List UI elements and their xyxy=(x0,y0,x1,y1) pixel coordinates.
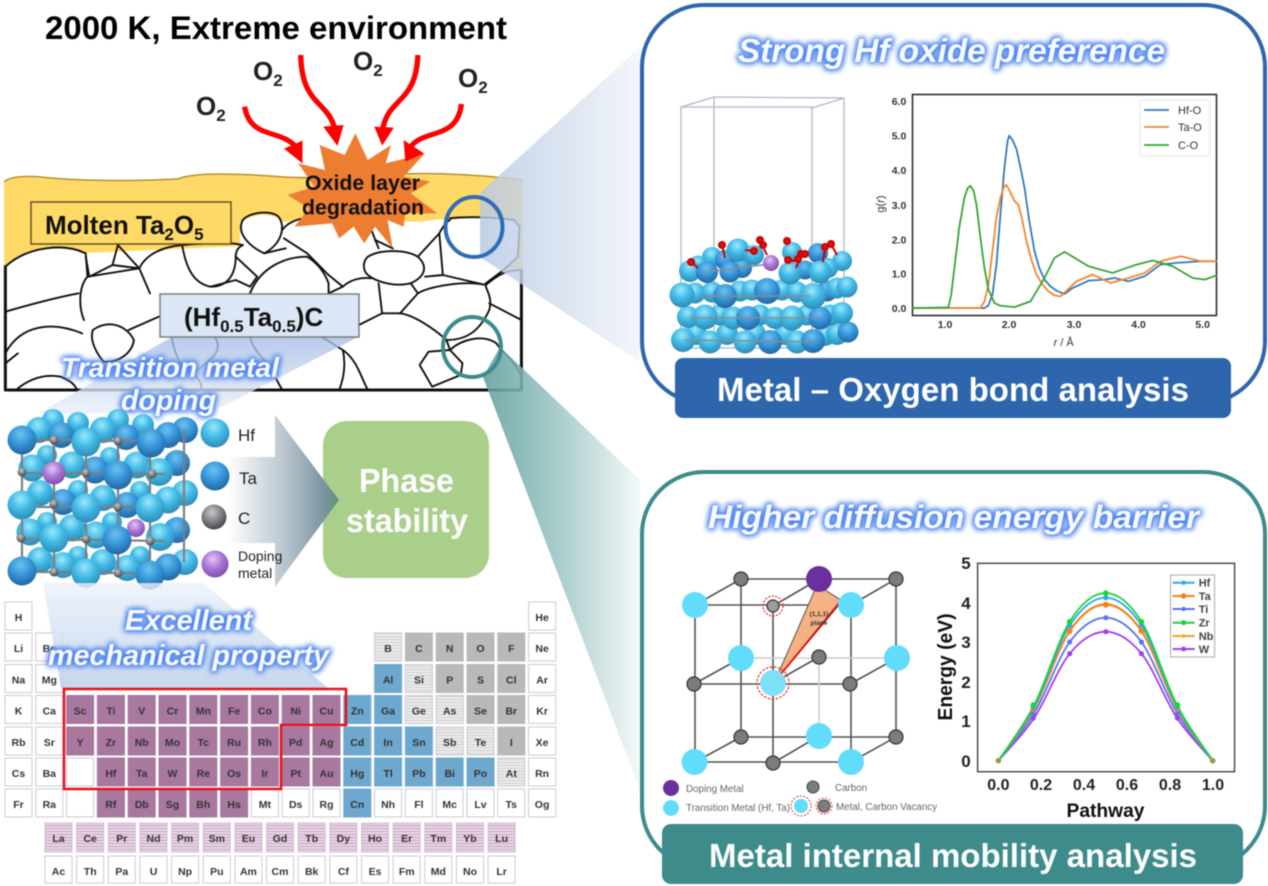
chart legend: W xyxy=(1199,644,1210,656)
panel outline xyxy=(642,5,1265,403)
actinides xyxy=(45,856,515,883)
chart legend xyxy=(1171,575,1215,657)
metal nodes xyxy=(682,592,910,775)
main block: Ru xyxy=(227,737,241,749)
lanthanides: Pm xyxy=(177,833,193,845)
far atoms xyxy=(37,409,154,566)
main block: P xyxy=(446,674,453,686)
panel heading: Higher diffusion energy barrier xyxy=(708,499,1201,535)
x tick labels: 2.0 xyxy=(1002,319,1016,331)
axis title: energy: Energy (eV) xyxy=(935,614,957,720)
x tick labels: 0.2 xyxy=(1030,777,1052,794)
axis titles xyxy=(875,195,1074,349)
axis title: pathway: Pathway xyxy=(1066,801,1145,822)
y tick labels: 4 xyxy=(961,594,971,613)
carbon vacancy ring xyxy=(763,596,783,616)
Hf: Hf xyxy=(238,426,255,445)
main block: Rf xyxy=(105,799,117,811)
x tick labels: 1.0 xyxy=(1202,777,1224,794)
main block: Se xyxy=(474,706,487,718)
lanthanides: Gd xyxy=(273,833,287,845)
main block: Pt xyxy=(290,768,301,780)
y tick labels: 1 xyxy=(961,712,971,731)
main block: Ni xyxy=(290,706,301,718)
main block: I xyxy=(510,737,513,749)
x tick labels: 0.4 xyxy=(1073,777,1095,794)
axis titles: r / Å xyxy=(1054,336,1074,349)
label: (Hf0.5Ta0.5)C: Ta xyxy=(244,302,273,332)
main block: Mo xyxy=(165,737,180,749)
lanthanides: Ce xyxy=(83,833,97,845)
barrier curves xyxy=(998,593,1213,761)
doping metal key xyxy=(663,780,744,796)
main block: Li xyxy=(14,643,23,655)
Doping metal xyxy=(202,548,282,581)
doping metal node xyxy=(806,566,832,592)
label: Molten Ta2O5: 5 xyxy=(194,225,204,244)
O2 label 4: O xyxy=(458,63,478,93)
chart legend: Ti xyxy=(1199,604,1208,616)
actinides: Ac xyxy=(52,866,65,878)
y tick labels: 2.0 xyxy=(892,234,906,246)
main block: Db xyxy=(135,799,149,811)
main block: He xyxy=(535,612,549,624)
C xyxy=(202,504,250,530)
x tick labels xyxy=(938,319,1210,331)
transition metal key xyxy=(663,800,790,816)
main block: Nb xyxy=(135,737,149,749)
main block: Br xyxy=(505,706,517,718)
lanthanides: Er xyxy=(401,833,412,845)
main block: Bh xyxy=(196,799,210,811)
main block: Fe xyxy=(228,706,240,718)
slab simulation cell xyxy=(670,97,858,354)
lanthanides: Sm xyxy=(209,833,225,845)
dopant atom in front layer xyxy=(42,462,66,484)
actinides: Pu xyxy=(210,866,224,878)
label: Molten Ta2O5: O xyxy=(174,210,194,240)
main block: Ag xyxy=(320,737,334,749)
main block: H xyxy=(15,612,22,624)
panel: metal internal mobility analysis xyxy=(642,472,1265,884)
x tick labels: 0.8 xyxy=(1159,777,1181,794)
y tick labels xyxy=(892,96,906,315)
Zr curve xyxy=(998,593,1213,761)
main block: B xyxy=(384,643,392,655)
actinides: Cf xyxy=(338,866,349,878)
callout: oxide layer degradation burst: degradation xyxy=(302,196,424,220)
C: C xyxy=(238,509,250,528)
middle atoms xyxy=(16,417,198,581)
callout: oxide layer degradation burst: Oxide layer xyxy=(305,172,420,195)
Ta xyxy=(200,462,258,490)
Nb curve xyxy=(998,604,1213,761)
main block: Lv xyxy=(474,799,487,811)
main block: Ba xyxy=(43,768,56,780)
microstructure: oxide layer and carbide grains xyxy=(4,174,523,390)
main block: Mn xyxy=(196,706,211,718)
Hf curve xyxy=(998,598,1213,761)
crystal structure: doped carbide xyxy=(8,409,198,590)
heading: transition metal doping: Transition metal xyxy=(61,352,280,383)
Ta: Ta xyxy=(239,469,258,488)
actinides: Bk xyxy=(305,866,319,878)
label: Molten Ta2O5 xyxy=(31,202,231,244)
main block: Fr xyxy=(13,799,24,811)
main block: N xyxy=(446,643,453,655)
chart legend xyxy=(1140,100,1210,156)
actinides: Th xyxy=(84,866,97,878)
main block: Cl xyxy=(506,674,517,686)
main block: Ne xyxy=(535,643,549,655)
actinides: Np xyxy=(178,866,192,878)
bonds xyxy=(22,430,184,575)
main block: C xyxy=(415,643,423,655)
heading: transition metal doping xyxy=(61,352,280,417)
y tick labels: 3.0 xyxy=(892,200,906,212)
main block: Mt xyxy=(259,799,272,811)
y tick labels: 5 xyxy=(961,554,971,573)
actinides: Es xyxy=(369,866,382,878)
W curve xyxy=(998,632,1213,761)
O2 label 3: O xyxy=(353,46,373,76)
main block: Cu xyxy=(320,706,334,718)
panel heading: Strong Hf oxide preference xyxy=(738,32,1165,69)
main block: Sg xyxy=(166,799,179,811)
lanthanides: Tm xyxy=(430,833,446,845)
main block: Rn xyxy=(535,768,549,780)
phase stability box xyxy=(323,421,489,578)
main block: Sr xyxy=(44,737,55,749)
axis titles: g(r) xyxy=(875,195,887,213)
y tick labels: 1.0 xyxy=(892,268,906,280)
carbon key xyxy=(807,781,867,794)
actinides: Pa xyxy=(115,866,128,878)
main block xyxy=(5,602,556,817)
phase stability box: Phase xyxy=(359,462,454,499)
actinides: U xyxy=(150,866,157,878)
oxygen arrows xyxy=(245,55,461,163)
lanthanides: Tb xyxy=(305,833,318,845)
main block: Xe xyxy=(536,737,549,749)
x tick labels xyxy=(987,777,1224,794)
main block: Tl xyxy=(383,768,393,780)
panel banner: Metal – Oxygen bond analysis xyxy=(717,371,1189,408)
periodic table xyxy=(5,602,556,883)
atom legend xyxy=(200,418,282,581)
metal vacancy ring xyxy=(757,667,789,699)
molten oxide layer xyxy=(4,175,523,268)
y tick labels: 2 xyxy=(961,673,971,692)
main block: Be xyxy=(43,643,56,655)
panel banner xyxy=(675,358,1231,418)
phase stability box: stability xyxy=(346,502,469,539)
y tick labels: 0.0 xyxy=(892,303,906,315)
x tick labels: 3.0 xyxy=(1067,319,1081,331)
wedge to doping crystal xyxy=(39,337,358,413)
actinides: Md xyxy=(431,866,446,878)
main block: Ts xyxy=(506,799,517,811)
heading: transition metal doping: doping xyxy=(121,385,216,417)
main block: Og xyxy=(535,799,549,811)
carbon key: Carbon xyxy=(835,783,867,794)
label: (Hf0.5Ta0.5)C: 0.5 xyxy=(272,317,296,336)
main block: Sn xyxy=(412,737,426,749)
chart legend: Hf xyxy=(1199,578,1211,590)
transition metal key: Transition Metal (Hf, Ta) xyxy=(686,803,790,814)
oxide layer top edge xyxy=(4,174,523,182)
Hf xyxy=(200,418,255,448)
Ta curve xyxy=(998,605,1213,761)
main block: Pb xyxy=(412,768,426,780)
Ta-O curve xyxy=(912,185,1217,308)
Ti curve xyxy=(998,618,1213,761)
x tick labels: 1.0 xyxy=(938,319,952,331)
main block: Ds xyxy=(289,799,303,811)
label: Molten Ta2O5: Molten Ta xyxy=(45,210,164,240)
O2 label 3: 2 xyxy=(373,61,383,80)
main block: Na xyxy=(12,674,25,686)
actinides: No xyxy=(463,866,477,878)
Doping metal: Doping xyxy=(238,548,282,564)
actinides: Fm xyxy=(399,866,415,878)
main block: Re xyxy=(197,768,210,780)
lattice diagram xyxy=(682,566,910,775)
O2 label 4: 2 xyxy=(478,78,488,97)
chart legend: Hf-O xyxy=(1178,105,1202,117)
main block: Ga xyxy=(381,706,395,718)
chart legend: Ta-O xyxy=(1178,122,1202,134)
main block: In xyxy=(383,737,393,749)
x tick labels: 0.0 xyxy=(987,777,1010,794)
chart legend: Ta xyxy=(1199,591,1212,603)
carbide grain area xyxy=(5,215,522,390)
main block: Cr xyxy=(167,706,178,718)
main block: Te xyxy=(475,737,486,749)
x tick labels: 4.0 xyxy=(1131,319,1146,331)
wedge to bond analysis panel xyxy=(480,47,640,362)
y tick labels: 5.0 xyxy=(892,130,906,142)
cell wireframe xyxy=(681,97,844,348)
main block: Zr xyxy=(106,737,116,749)
lanthanides: Nd xyxy=(146,833,160,845)
main block: Mc xyxy=(442,799,457,811)
main block: W xyxy=(168,768,178,780)
title: 2000 K, Extreme environment xyxy=(45,10,507,46)
arrow 3 xyxy=(374,55,418,146)
label: (Hf0.5Ta0.5)C: 0.5 xyxy=(220,317,244,336)
arrow 1 xyxy=(245,107,302,163)
y tick labels: 6.0 xyxy=(892,96,906,108)
main block: Rg xyxy=(320,799,334,811)
callout: oxide layer degradation burst xyxy=(287,133,437,248)
main block: Sc xyxy=(74,706,87,718)
O2 label 2: 2 xyxy=(273,71,283,90)
dopant atom xyxy=(763,255,779,271)
lanthanides: La xyxy=(52,833,65,845)
O2 label 1: O xyxy=(196,91,216,121)
actinides: Am xyxy=(240,866,257,878)
main block: Ti xyxy=(106,706,116,718)
main block: S xyxy=(477,674,484,686)
chart: g(r) radial distribution xyxy=(875,94,1217,349)
main block: At xyxy=(506,768,517,780)
main block: Cn xyxy=(350,799,364,811)
main block: Kr xyxy=(536,706,548,718)
panel banner xyxy=(662,824,1243,884)
main block: Nh xyxy=(381,799,395,811)
magnifier circle: oxide interface xyxy=(446,197,502,257)
arrow 2 xyxy=(301,55,344,146)
y tick labels: 3 xyxy=(961,633,971,652)
y tick labels xyxy=(961,554,971,771)
y tick labels: 0 xyxy=(961,752,971,771)
magnifier circle: carbide interior xyxy=(443,317,501,377)
main block: Ge xyxy=(412,706,426,718)
heading: excellent mechanical property: Excellent xyxy=(125,605,253,637)
main block: Ar xyxy=(536,674,548,686)
main block: Sb xyxy=(443,737,456,749)
wedge to mobility analysis panel xyxy=(483,347,640,790)
panel outline xyxy=(642,472,1265,868)
main block: Cd xyxy=(350,737,364,749)
main block: Hs xyxy=(227,799,241,811)
surface oxygen atoms xyxy=(688,237,837,268)
lanthanides: Pr xyxy=(116,833,127,845)
main block: Tc xyxy=(198,737,209,749)
main block: Po xyxy=(474,768,487,780)
main block: Co xyxy=(258,706,272,718)
axes frame xyxy=(978,563,1235,772)
lanthanides: Eu xyxy=(242,833,255,845)
slab atoms xyxy=(670,238,858,354)
heading: excellent mechanical property: mechanical property xyxy=(48,640,331,672)
main block: Al xyxy=(383,674,393,686)
carbon atoms xyxy=(16,436,156,578)
doping metal key: Doping Metal xyxy=(686,784,744,795)
lanthanides: Yb xyxy=(463,833,477,845)
main block: Cs xyxy=(12,768,25,780)
Hf-O curve xyxy=(912,136,1217,308)
lanthanides: Lu xyxy=(495,833,508,845)
main block: As xyxy=(443,706,457,718)
O2 label 1: 2 xyxy=(216,106,226,125)
(1,1,1) plane: plane xyxy=(811,620,828,627)
main block: O xyxy=(476,643,485,655)
label: (Hf0.5Ta0.5)C: )C xyxy=(296,302,323,332)
(1,1,1) plane: (1,1,1) xyxy=(810,611,828,618)
lanthanides: Dy xyxy=(337,833,350,845)
arrow 4 xyxy=(404,104,461,162)
main block: Hf xyxy=(105,768,117,780)
actinides: Cm xyxy=(272,866,288,878)
main block: Au xyxy=(320,768,334,780)
x tick labels: 0.6 xyxy=(1116,777,1138,794)
O2 labels xyxy=(196,46,488,125)
main block: Mg xyxy=(42,674,57,686)
C-O curve xyxy=(912,186,1217,308)
Doping metal: metal xyxy=(238,565,272,581)
transition metal selection outline xyxy=(64,689,346,789)
arrow to phase stability xyxy=(228,415,339,587)
main block: Ta xyxy=(136,768,148,780)
label: (Hf0.5Ta0.5)C: (Hf xyxy=(184,302,220,332)
main block: Hg xyxy=(350,768,364,780)
(1,1,1) plane xyxy=(775,585,841,681)
main block: Ca xyxy=(43,706,56,718)
lanthanides xyxy=(45,823,515,852)
label: (Hf0.5Ta0.5)C xyxy=(160,294,359,337)
x tick labels: 5.0 xyxy=(1195,319,1210,331)
slab bonds xyxy=(685,264,820,342)
label: Molten Ta2O5: 2 xyxy=(164,225,174,244)
main block: Rh xyxy=(258,737,272,749)
panel banner: Metal internal mobility analysis xyxy=(709,837,1197,874)
vacancy key: Metal, Carbon Vacancy xyxy=(836,802,937,813)
lattice legend xyxy=(663,780,937,816)
main block: Rb xyxy=(12,737,26,749)
chart: energy along pathway xyxy=(935,554,1235,822)
axes frame xyxy=(912,94,1216,316)
front atoms xyxy=(8,426,166,590)
main block: Fl xyxy=(414,799,424,811)
main block: F xyxy=(508,643,515,655)
carbon nodes xyxy=(687,572,903,770)
main block: Si xyxy=(414,674,424,686)
lanthanides: Ho xyxy=(368,833,382,845)
curves xyxy=(912,136,1217,308)
vacancy key xyxy=(791,796,937,816)
actinides: Lr xyxy=(496,866,507,878)
main block: V xyxy=(138,706,145,718)
heading: excellent mechanical property xyxy=(48,605,331,672)
main block: Pd xyxy=(289,737,302,749)
main block: Os xyxy=(227,768,241,780)
lattice edges xyxy=(694,579,897,763)
grain boundaries xyxy=(5,213,521,390)
panel: metal-oxygen bond analysis xyxy=(642,5,1265,418)
chart legend: C-O xyxy=(1178,140,1199,152)
main block: Zn xyxy=(351,706,364,718)
O2 label 2: O xyxy=(253,56,273,86)
main block: Bi xyxy=(444,768,455,780)
main block: Ir xyxy=(261,768,268,780)
main block: K xyxy=(15,706,23,718)
y tick labels: 4.0 xyxy=(892,165,906,177)
chart legend: Nb xyxy=(1199,631,1214,643)
chart legend: Zr xyxy=(1199,618,1210,630)
main block: Ra xyxy=(43,799,56,811)
wedge to periodic table xyxy=(43,583,328,688)
main block: Y xyxy=(77,737,84,749)
data markers xyxy=(996,590,1215,764)
